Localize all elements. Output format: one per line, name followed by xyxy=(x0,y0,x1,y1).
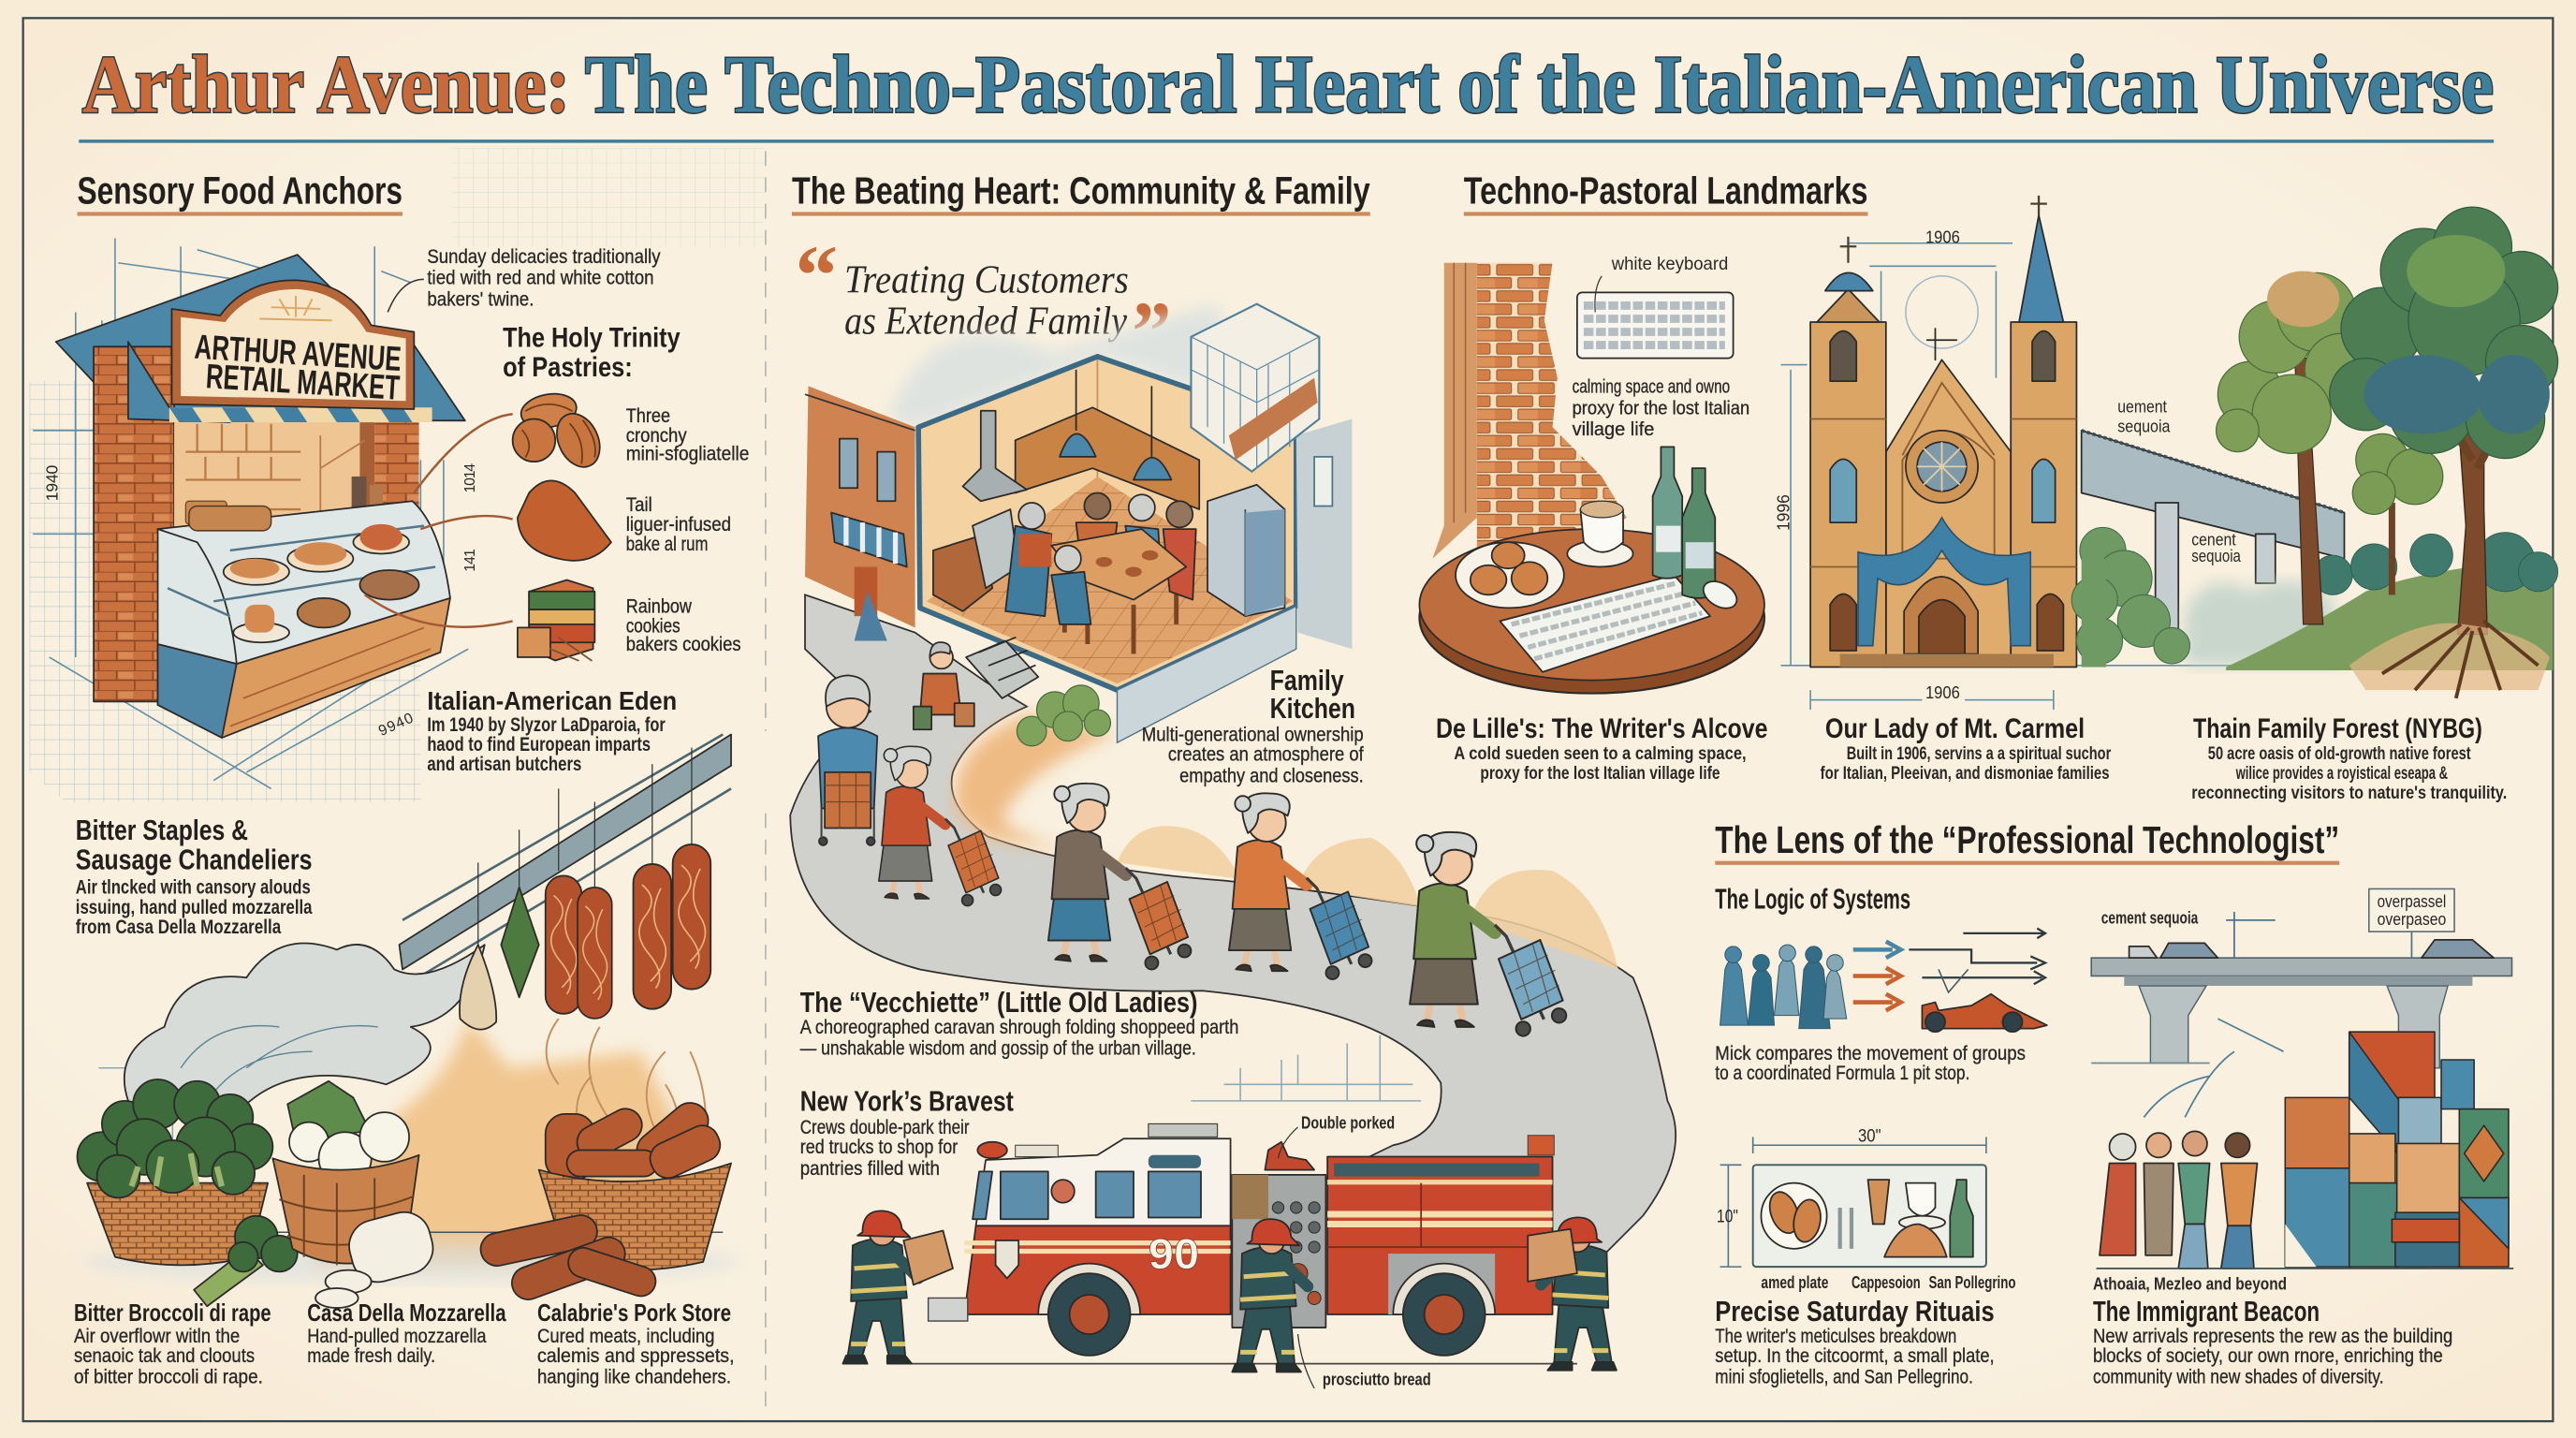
text: family kitchen xyxy=(1142,664,1364,786)
text: basket captions: Calabrie's Pork Store xyxy=(537,1300,731,1327)
text: church caption: Our Lady of Mt. Carmel xyxy=(1825,713,2085,744)
diagram: groups to pit stop xyxy=(1720,929,2047,1032)
diagram: immigrant group xyxy=(2096,1019,2513,1269)
text: basket captions: made fresh daily. xyxy=(307,1345,435,1367)
text: pastries: liguer-infused xyxy=(626,514,731,536)
text: bitter staples xyxy=(76,814,313,938)
text: bitter staples: Air tlncked with cansory alouds xyxy=(76,877,311,899)
text: basket captions: Cured meats, including xyxy=(537,1326,714,1347)
label: white keyboard: white keyboard xyxy=(1611,255,1728,274)
label: uement sequoia: sequoia xyxy=(2117,417,2171,436)
round table xyxy=(1419,447,1764,694)
icon: sfogliatelle xyxy=(513,389,608,474)
text: precise saturday rituals: setup. In the citcoormt, a small plate, xyxy=(1715,1345,1995,1367)
text: new york's bravest: New York’s Bravest xyxy=(800,1084,1014,1117)
heading: logic of systems: The Logic of Systems xyxy=(1715,883,1910,916)
awning xyxy=(128,342,465,422)
labels: place setting items: Cappesoion xyxy=(1852,1272,1921,1292)
label: prosciutto bread: prosciutto bread xyxy=(1323,1369,1431,1388)
doors and blue drape xyxy=(1840,518,2054,668)
panel: thain family forest and overpass xyxy=(2071,207,2558,698)
text: forest caption xyxy=(2191,713,2507,803)
steel rail xyxy=(400,734,731,969)
text: mick: to a coordinated Formula 1 pit stop. xyxy=(1715,1063,1969,1084)
text: immigrant beacon xyxy=(2093,1295,2452,1388)
panel: market illustration: 9940 xyxy=(376,711,416,740)
text: bitter staples: issuing, hand pulled mozzarella xyxy=(76,897,313,918)
label: prosciutto bread xyxy=(1298,1334,1431,1388)
text: de lille's caption xyxy=(1436,713,1767,784)
text: mick: Mick compares the movement of groups xyxy=(1715,1043,2026,1064)
text: new york's bravest xyxy=(800,1084,1014,1180)
text: de lille's caption: De Lille's: The Writer's Alcove xyxy=(1436,713,1767,744)
text: immigrant beacon: community with new shades of diversity. xyxy=(2093,1367,2384,1388)
cement overpass xyxy=(2082,431,2344,651)
kitchen walls and floor xyxy=(918,357,1296,690)
text: pastries: bake al rum xyxy=(626,534,708,555)
cab: 90 xyxy=(1149,1230,1199,1278)
small lady with bags xyxy=(914,642,974,729)
text: immigrant beacon: New arrivals represents the rew as the building xyxy=(2093,1326,2452,1347)
brick wall xyxy=(1432,263,1627,559)
text: precise saturday rituals xyxy=(1715,1295,1995,1388)
panel: market baskets xyxy=(78,1079,739,1308)
text: pastries: Three xyxy=(626,405,670,427)
sign xyxy=(171,280,414,409)
panel: market illustration: 1014 xyxy=(462,463,478,493)
left tower xyxy=(1810,237,1886,668)
text: italian-american eden xyxy=(427,686,677,775)
title: Arthur Avenue: xyxy=(82,38,570,129)
text: italian-american eden: haod to find European imparts xyxy=(427,734,651,756)
text: bitter staples: Sausage Chandeliers xyxy=(76,843,313,875)
label: double porked xyxy=(1278,1113,1395,1158)
kitchen outline xyxy=(918,357,1296,690)
text: keyboard note: calming space and owno xyxy=(1573,376,1730,397)
label: 30 inch: 30" xyxy=(1858,1127,1881,1147)
panel: market illustration xyxy=(30,238,513,801)
text: keyboard note: proxy for the lost Italian xyxy=(1573,398,1749,418)
text: italian-american eden: and artisan butchers xyxy=(427,754,581,775)
label: cement sequoia: cement sequoia xyxy=(2101,907,2199,927)
lady with blue cardigan xyxy=(818,675,877,845)
smoke and warm air xyxy=(98,944,707,1265)
panel: de lille's alcove xyxy=(1419,263,1764,694)
wireframe tower xyxy=(1191,304,1319,472)
quote xyxy=(795,228,1171,378)
sign: RETAIL MARKET xyxy=(205,357,402,407)
text: basket captions: Casa Della Mozzarella xyxy=(307,1300,506,1327)
label: cenent sequoia: sequoia xyxy=(2191,546,2242,565)
panel: road xyxy=(790,594,1676,1298)
group: vecchiette caravan xyxy=(818,642,1566,1036)
formula 1 car xyxy=(1922,994,2047,1032)
wheels xyxy=(1038,1264,1495,1356)
heading: holy trinity: The Holy Trinity xyxy=(503,322,681,353)
text: family kitchen: Kitchen xyxy=(1270,692,1355,725)
text: forest caption: reconnecting visitors to nature's tranquility. xyxy=(2191,784,2507,803)
text: vecchiette xyxy=(800,986,1238,1060)
icon: rum baba xyxy=(518,480,611,561)
text: pastries: cookies xyxy=(626,616,681,638)
text: italian-american eden: Italian-American Eden xyxy=(427,686,677,715)
rose window xyxy=(1906,431,1978,503)
diagram: overpass xyxy=(2091,893,2511,1068)
pump panel xyxy=(1232,1142,1325,1328)
heading: lens of the technologist: The Lens of the “Professional Technologist” xyxy=(1715,818,2339,861)
text: forest caption: Thain Family Forest (NYBG) xyxy=(2193,713,2482,744)
text: vecchiette: — unshakable wisdom and gossip of the urban village. xyxy=(800,1038,1196,1060)
label: 10 inch: 10" xyxy=(1717,1208,1738,1227)
text: bitter staples: from Casa Della Mozzarella xyxy=(76,917,281,938)
text: basket captions: Hand-pulled mozzarella xyxy=(307,1326,487,1347)
basket: mozzarella xyxy=(272,1081,439,1308)
orange wash xyxy=(955,714,1134,862)
label: church 1906 top: 1906 xyxy=(1925,227,1960,247)
quote: “ xyxy=(795,228,838,323)
text: pastries xyxy=(626,405,749,655)
text: pastries: Tail xyxy=(626,494,652,516)
shrub xyxy=(1017,685,1110,746)
text: de lille's caption: proxy for the lost Italian village life xyxy=(1480,764,1720,784)
basket: cured meats xyxy=(477,1095,731,1304)
quote: ” xyxy=(1132,284,1171,378)
keyboard spec xyxy=(1577,276,1734,359)
text: immigrant beacon: The Immigrant Beacon xyxy=(2093,1295,2320,1328)
text: de lille's caption: A cold sueden seen to a calming space, xyxy=(1454,744,1747,764)
text: basket captions xyxy=(74,1300,735,1388)
text: basket captions: Air overflowr witln the xyxy=(74,1326,240,1347)
heading: landmarks: Techno-Pastoral Landmarks xyxy=(1464,169,1868,213)
text: italian-american eden: Im 1940 by Slyzor LaDparoia, for xyxy=(427,714,666,736)
text: precise saturday rituals: mini sfoglietells, and San Pellegrino. xyxy=(1715,1367,1973,1388)
text: church caption: Built in 1906, servins a a spiritual suchor xyxy=(1847,744,2112,764)
labels: place setting items: amed plate xyxy=(1761,1272,1828,1292)
label: overpass box: overpassel xyxy=(2378,891,2446,911)
text: family kitchen: creates an atmosphere of xyxy=(1168,744,1364,766)
text: pastries: bakers cookies xyxy=(626,634,741,655)
text: forest caption: 50 acre oasis of old-growth native forest xyxy=(2208,744,2471,764)
text: basket captions: senaoic tak and cloouts xyxy=(74,1345,255,1367)
labels: place setting items xyxy=(1761,1272,2015,1292)
text: forest caption: wilice provides a royistical eseapa & xyxy=(2235,764,2448,784)
heading: beating heart: The Beating Heart: Community & Family xyxy=(792,169,1370,213)
diagram: immigrant mosaic xyxy=(2285,1032,2509,1267)
text: new york's bravest: red trucks to shop for xyxy=(800,1137,958,1158)
text: precise saturday rituals: The writer's meticulses breakdown xyxy=(1715,1326,1956,1347)
sign: ARTHUR AVENUE xyxy=(194,328,402,378)
text: bitter staples: Bitter Staples & xyxy=(76,814,248,846)
table and family xyxy=(1005,493,1196,654)
quote: Treating Customers xyxy=(844,257,1129,301)
panel: market illustration: 141 xyxy=(462,549,478,572)
labels: place setting items: San Pollegrino xyxy=(1928,1272,2015,1292)
text: twine note xyxy=(427,246,661,310)
label: overpass box xyxy=(2369,888,2454,932)
firefighters xyxy=(842,1211,1617,1372)
text: precise saturday rituals: Precise Saturday Rituais xyxy=(1715,1295,1995,1328)
people silhouettes xyxy=(1720,945,1847,1029)
facade xyxy=(1886,360,2011,668)
right tower xyxy=(2011,196,2076,668)
text: basket captions: of bitter broccoli di rape. xyxy=(74,1367,263,1388)
text: mick xyxy=(1715,1043,2026,1084)
panel: market illustration: 1940 xyxy=(42,464,61,501)
left brick building xyxy=(805,386,915,640)
text: family kitchen: Multi-generational ownership xyxy=(1142,725,1364,746)
text: keyboard note: village life xyxy=(1573,419,1654,440)
text: twine note: tied with red and white cotton xyxy=(427,268,654,289)
panel: our lady of mt carmel church xyxy=(1781,196,2365,710)
arrows xyxy=(1853,942,1901,958)
heading: holy trinity: of Pastries: xyxy=(503,352,633,383)
diagram: saturday place setting xyxy=(1720,1137,1986,1267)
text: family kitchen: empathy and closeness. xyxy=(1179,765,1364,786)
steps xyxy=(966,638,1038,698)
text: new york's bravest: Crews double-park their xyxy=(800,1117,970,1138)
text: keyboard note xyxy=(1573,376,1749,440)
label: cenent sequoia xyxy=(2191,530,2242,565)
basket: broccoli xyxy=(78,1079,298,1306)
cab xyxy=(929,1123,1231,1321)
basement level xyxy=(1117,607,1296,742)
panel: family kitchen cutaway xyxy=(805,304,1352,746)
text: pastries: Rainbow xyxy=(626,596,693,618)
text: pastries: mini-sfogliatelle xyxy=(626,443,749,464)
heading: sensory food anchors: Sensory Food Anchors xyxy=(78,169,402,213)
text: basket captions: hanging like chandehers. xyxy=(537,1367,731,1388)
forest floor xyxy=(2071,527,2190,668)
text: church caption: for Italian, Pleeivan, and dismoniae families xyxy=(1821,764,2110,784)
text: twine note: Sunday delicacies traditionally xyxy=(427,246,661,268)
text: pastries: cronchy xyxy=(626,425,687,447)
label: uement sequoia: uement xyxy=(2117,397,2167,417)
panel: fire truck xyxy=(842,1123,1617,1372)
brick pillar and back wall xyxy=(94,346,419,701)
display case xyxy=(158,501,450,738)
tree: left birch xyxy=(2217,271,2443,624)
text: basket captions: calemis and sppressets, xyxy=(537,1345,735,1367)
label: church 1996 vertical: 1996 xyxy=(1773,494,1793,531)
label: immigrant origins: Athoaia, Mezleo and beyond xyxy=(2093,1274,2287,1294)
roof xyxy=(56,255,465,420)
label: cenent sequoia: cenent xyxy=(2191,530,2236,550)
icon: rainbow cookies xyxy=(518,580,594,661)
text: basket captions: Bitter Broccoli di rape xyxy=(74,1300,271,1327)
tree: great oak xyxy=(2330,207,2558,698)
heading: holy trinity xyxy=(503,322,681,383)
text: immigrant beacon: blocks of society, our own rnore, enriching the xyxy=(2093,1345,2443,1367)
panel: hanging cured meats xyxy=(98,734,731,1265)
label: uement sequoia xyxy=(2117,397,2171,436)
text: twine note: bakers' twine. xyxy=(427,288,534,310)
text: family kitchen: Family xyxy=(1270,664,1344,697)
label: church 1906 bottom: 1906 xyxy=(1925,682,1960,702)
pump body xyxy=(1327,1136,1554,1314)
text: vecchiette: The “Vecchiette” (Little Old Ladies) xyxy=(800,986,1197,1019)
sky wash xyxy=(887,304,1249,427)
text: church caption xyxy=(1821,713,2112,784)
text: new york's bravest: pantries filled with xyxy=(800,1158,940,1180)
quote: as Extended Family xyxy=(844,299,1127,343)
label: double porked: Double porked xyxy=(1301,1113,1395,1133)
right grey building xyxy=(1296,419,1352,649)
text: vecchiette: A choreographed caravan shrough folding shoppeed parth xyxy=(800,1017,1238,1038)
label: overpass box: overpaseo xyxy=(2378,909,2446,929)
